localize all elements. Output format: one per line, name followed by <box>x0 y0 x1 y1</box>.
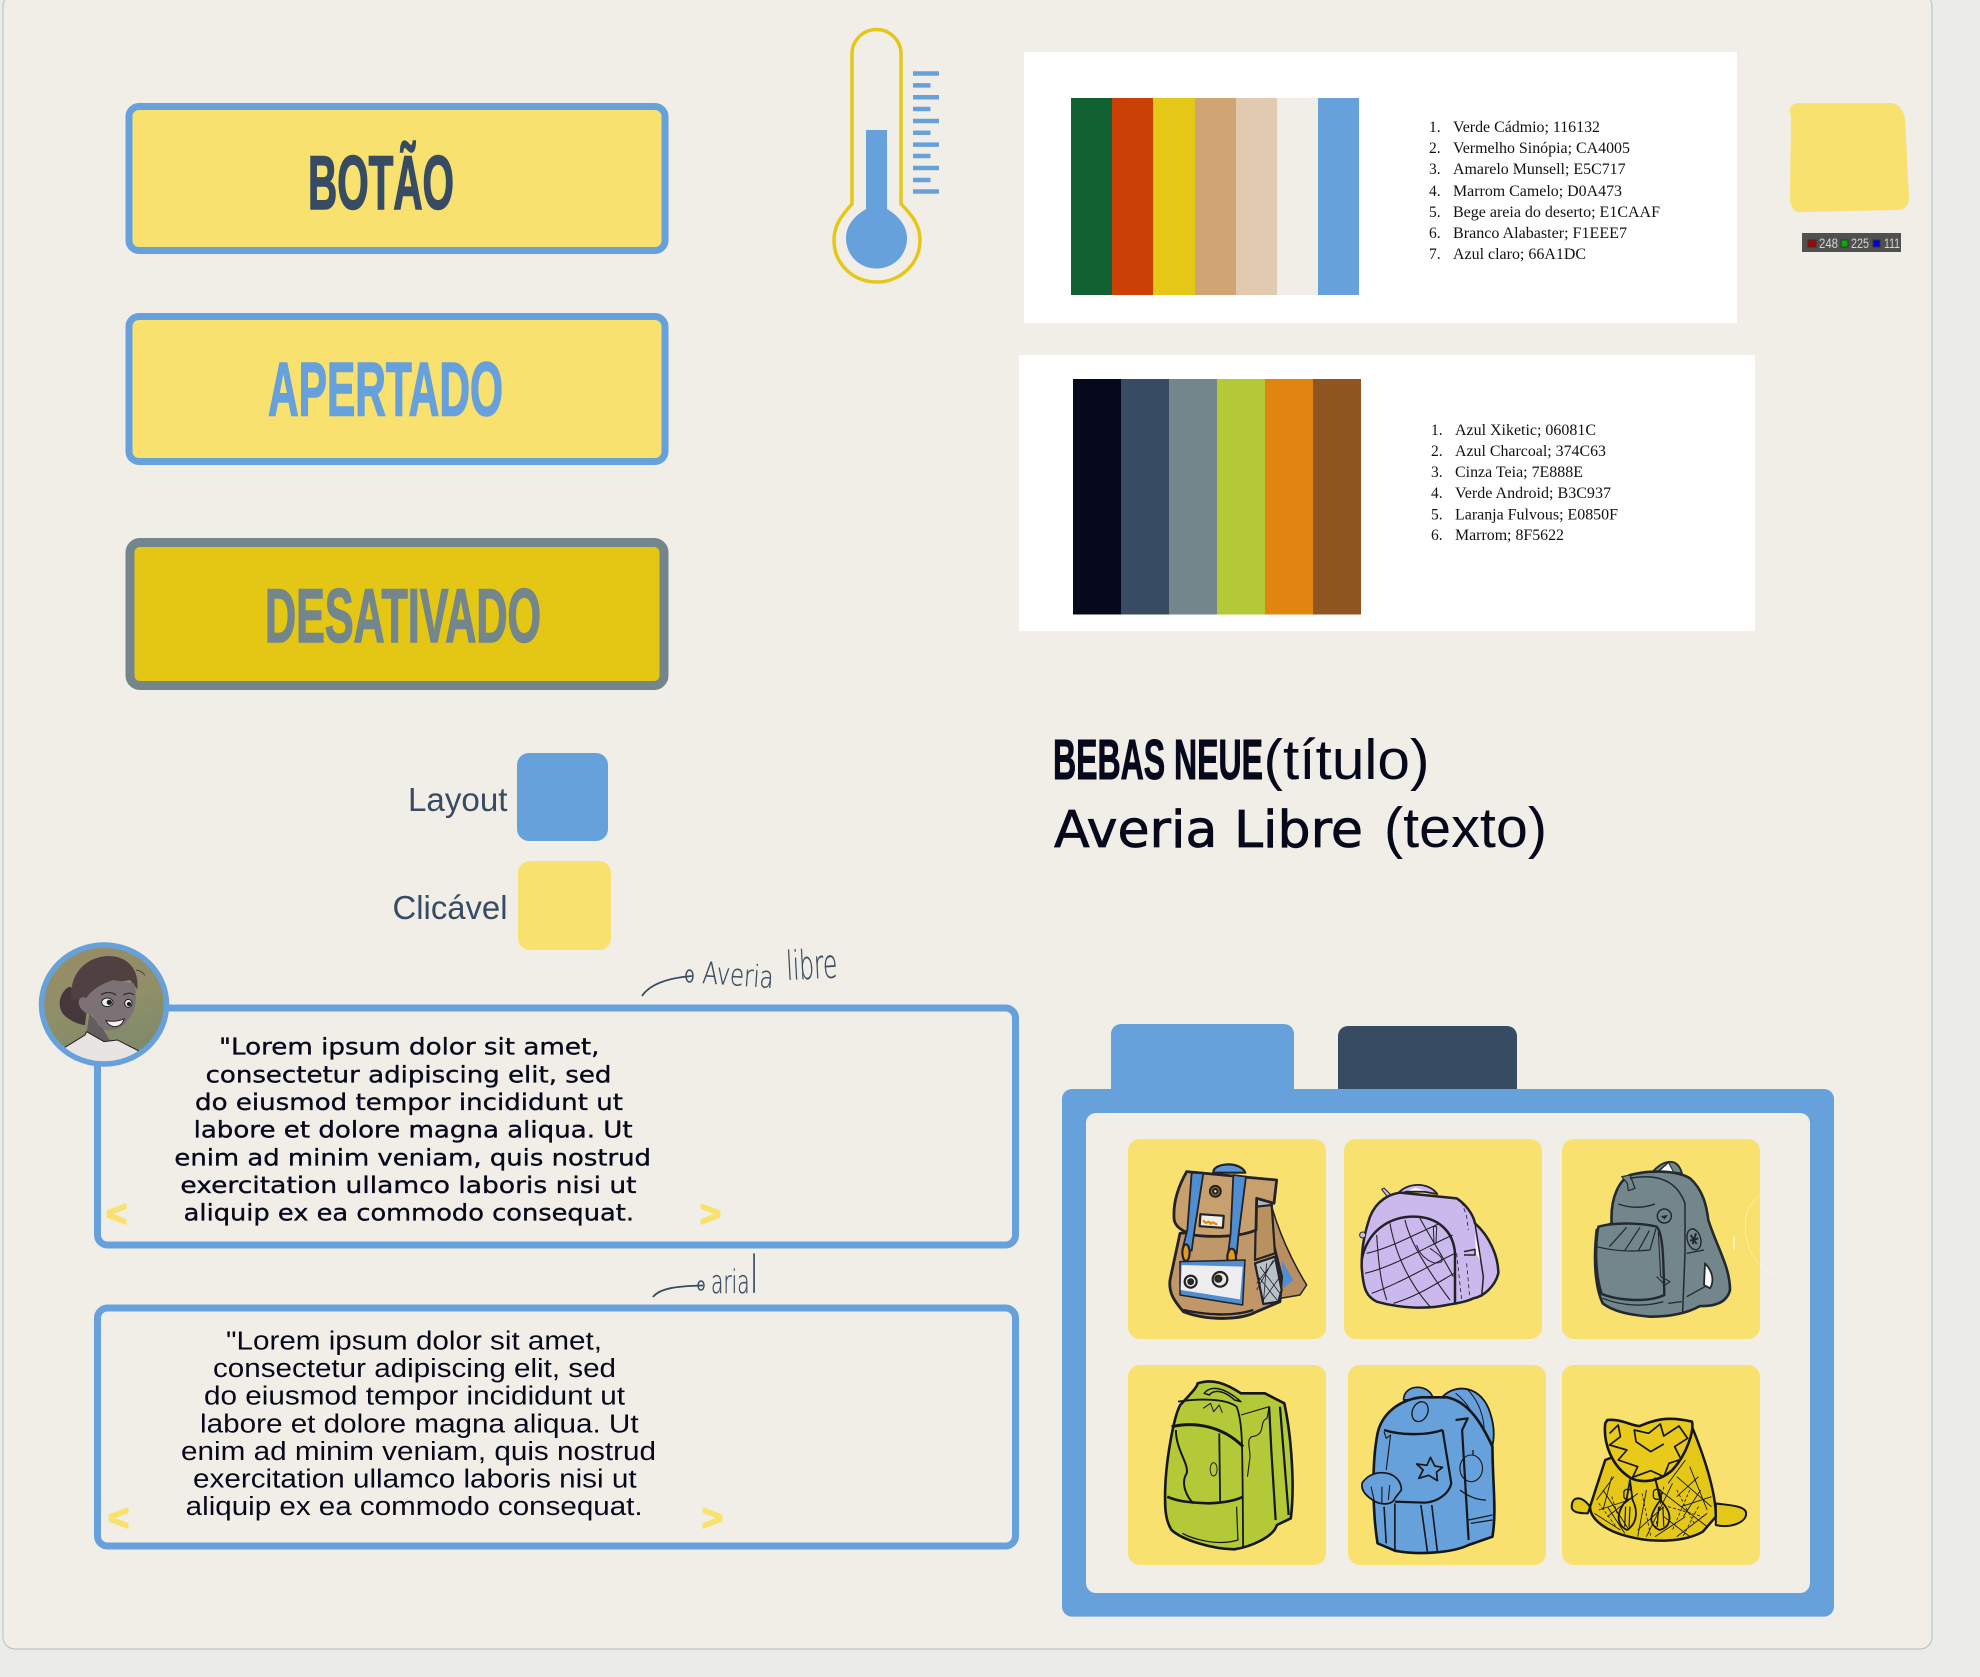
card: brown backpack <box>1128 1139 1326 1339</box>
colour picker readout: 111 <box>1884 236 1900 251</box>
arrow: next: > <box>700 1193 721 1234</box>
eyes and smile <box>102 998 113 1007</box>
palette 2 colour list: 6. <box>1431 527 1443 544</box>
tab: inactive <box>1338 1026 1517 1089</box>
panel: backpack folder <box>1062 1024 1834 1617</box>
font title: Averia Libre <box>1054 796 1547 860</box>
palette 1 colour list: 1. <box>1429 119 1441 136</box>
yellow colour sample <box>1790 103 1909 212</box>
palette 2 colour list: Cinza Teia; 7E888E <box>1455 464 1583 481</box>
text box: Arial sample: exercitation ullamco laboris nisi ut <box>193 1464 637 1494</box>
text box: Averia Libre sample: exercitation ullamco laboris nisi ut <box>180 1173 637 1199</box>
neck <box>87 1014 110 1041</box>
palette 2 colour list: Azul Xiketic; 06081C <box>1455 422 1596 439</box>
button: disabled <box>130 542 664 686</box>
palette 1 colour list: 3. <box>1429 161 1441 178</box>
palette 1 colour list: 4. <box>1429 183 1441 200</box>
annotation: arial: arial <box>711 1246 759 1306</box>
colour picker readout: 248 <box>1819 236 1838 251</box>
button: disabled: DESATIVADO <box>265 574 541 659</box>
card: purple backpack <box>1344 1139 1542 1339</box>
legend: layout: Layout <box>408 782 508 819</box>
palette 1 colour list: 6. <box>1429 225 1441 242</box>
text box: Averia Libre sample: aliquip ex ea commodo consequat. <box>184 1201 634 1227</box>
text box: Arial sample: labore et dolore magna aliqua. Ut <box>200 1408 639 1438</box>
palette 1 colour list: Marrom Camelo; D0A473 <box>1453 183 1622 200</box>
shirt <box>64 1031 139 1062</box>
palette 2 colour list <box>1431 422 1618 544</box>
card: blue backpack <box>1348 1365 1546 1565</box>
palette 2 colour list: 4. <box>1431 485 1443 502</box>
legend: layout <box>408 753 608 841</box>
face <box>79 980 136 1030</box>
palette 1 colour list: Vermelho Sinópia; CA4005 <box>1453 140 1630 157</box>
colour picker readout: 225 <box>1851 236 1869 251</box>
folder frame <box>1062 1089 1834 1617</box>
annotation: Averia libre: libre <box>785 941 838 990</box>
tab: active <box>1111 1024 1294 1104</box>
text box: Averia Libre sample: "Lorem ipsum dolor sit amet, <box>219 1035 600 1061</box>
palette 1 colour list: Amarelo Munsell; E5C717 <box>1453 161 1626 178</box>
palette 1 colour list: 5. <box>1429 204 1441 221</box>
colour picker readout <box>1802 233 1901 252</box>
text box: Arial sample <box>98 1308 1016 1546</box>
arrow: next: > <box>702 1497 723 1538</box>
font title: Bebas Neue: BEBAS NEUE <box>1053 728 1263 792</box>
palette 2 colour list: Verde Android; B3C937 <box>1455 485 1611 502</box>
hair <box>71 956 138 1000</box>
palette 2 colour list: Laranja Fulvous; E0850F <box>1455 506 1618 524</box>
font title: Bebas Neue: (título) <box>1264 728 1430 792</box>
palette 2 colour list: 1. <box>1431 422 1443 439</box>
text box: Averia Libre sample: enim ad minim veniam, quis nostrud <box>174 1145 651 1171</box>
icon: thermometer <box>834 29 939 282</box>
palette 2 colour list: Azul Charcoal; 374C63 <box>1455 443 1606 460</box>
text box: Arial sample: enim ad minim veniam, quis nostrud <box>181 1436 656 1466</box>
card: grey backpack <box>1562 1139 1773 1339</box>
text box: Averia Libre sample <box>98 1008 1016 1245</box>
text box: Arial sample: aliquip ex ea commodo consequat. <box>186 1491 643 1521</box>
palette 1 colour list: Verde Cádmio; 116132 <box>1453 119 1600 136</box>
button: pressed <box>129 316 665 462</box>
annotation: Averia libre <box>642 941 838 996</box>
card: yellow backpack <box>1562 1365 1760 1565</box>
panel: palette 2 <box>1019 355 1755 631</box>
text box: Averia Libre sample: labore et dolore magna aliqua. Ut <box>194 1118 633 1144</box>
palette 1 colour list: Bege areia do deserto; E1CAAF <box>1453 204 1660 221</box>
panel: palette 1 <box>1024 52 1737 323</box>
annotation: arial <box>653 1246 759 1306</box>
legend: clickable: Clicável <box>392 890 508 927</box>
button: default: BOTÃO <box>308 141 454 226</box>
button: pressed: APERTADO <box>268 348 503 432</box>
annotation: Averia libre: Averia <box>701 956 775 996</box>
palette 1 colour list: Azul claro; 66A1DC <box>1453 246 1586 263</box>
palette 1 colour stripes <box>1071 98 1359 295</box>
palette 2 colour stripes <box>1073 379 1361 614</box>
font title: Averia Libre: Averia Libre <box>1054 801 1363 860</box>
arrow: previous: < <box>108 1497 129 1538</box>
text box: Averia Libre sample: consectetur adipiscing elit, sed <box>206 1062 611 1088</box>
palette 1 colour list: 7. <box>1429 246 1441 263</box>
legend: clickable <box>392 861 611 950</box>
avatar portrait <box>42 945 166 1070</box>
button: default <box>129 106 665 250</box>
palette 1 colour list: 2. <box>1429 140 1441 157</box>
card: green backpack <box>1128 1365 1326 1565</box>
palette 1 colour list: Branco Alabaster; F1EEE7 <box>1453 225 1627 242</box>
text box: Averia Libre sample: do eiusmod tempor incididunt ut <box>195 1090 623 1116</box>
palette 1 colour list <box>1429 119 1660 263</box>
palette 2 colour list: Marrom; 8F5622 <box>1455 527 1564 544</box>
text box: Arial sample: consectetur adipiscing elit, sed <box>213 1353 616 1383</box>
palette 2 colour list: 5. <box>1431 506 1443 524</box>
text box: Arial sample: do eiusmod tempor incididunt ut <box>204 1381 626 1411</box>
palette 2 colour list: 2. <box>1431 443 1443 460</box>
palette 2 colour list: 3. <box>1431 464 1443 481</box>
arrow: previous: < <box>106 1193 127 1234</box>
hair bun <box>60 987 88 1025</box>
font title: Averia Libre: (texto) <box>1384 796 1547 860</box>
text box: Arial sample: "Lorem ipsum dolor sit amet, <box>226 1326 602 1356</box>
